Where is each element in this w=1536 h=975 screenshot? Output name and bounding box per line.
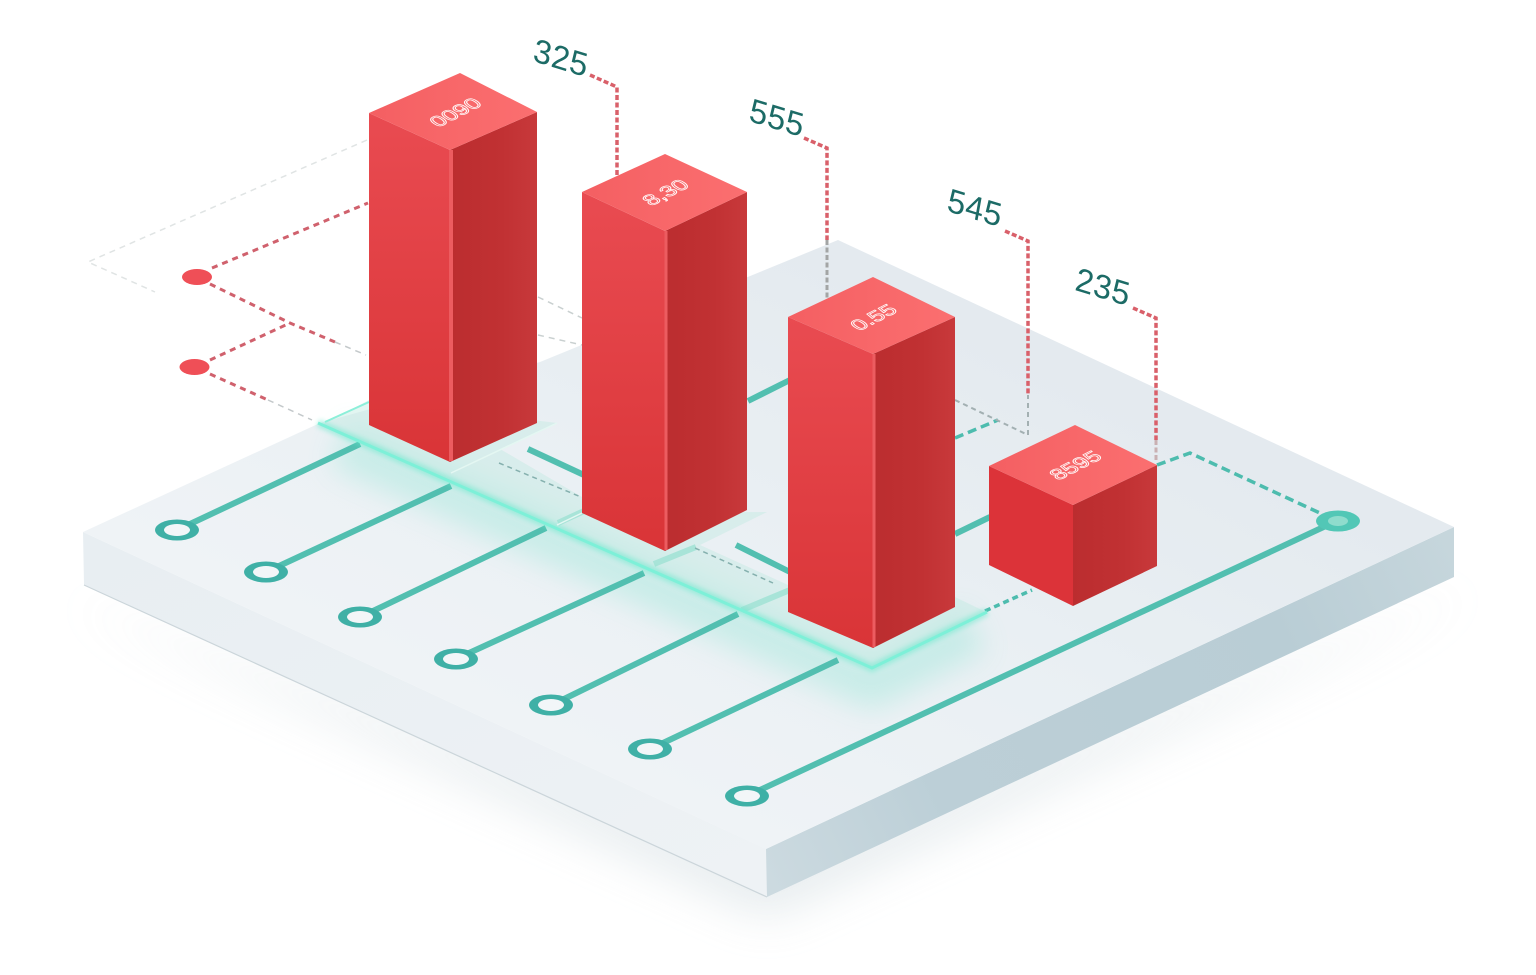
bar 1: [369, 73, 537, 462]
connector line 3: [338, 528, 546, 628]
value label 235 with leader: [1073, 261, 1156, 460]
platform shadow: [70, 590, 1475, 915]
glowing highlight band: [318, 402, 987, 668]
red dot 1: [182, 269, 212, 285]
glass plate under bar 2: [557, 513, 582, 525]
connector line 1: [155, 444, 360, 540]
value label 555 with leader: 555: [747, 92, 807, 145]
value label 555 with leader: [747, 92, 827, 298]
value label 325 with leader: [531, 32, 617, 176]
tinted glass region beside the band: [322, 400, 986, 668]
bar 2 top label: 8,30: [638, 177, 694, 209]
connector line 6: [628, 660, 838, 760]
glass plate under bar 1: [451, 423, 557, 473]
connector segments behind bars: [528, 380, 990, 572]
value label 545 with leader: [945, 182, 1028, 395]
bar 4: [989, 425, 1157, 606]
bar 4 top label: 8595: [1045, 448, 1107, 483]
panel: platform slab: [83, 240, 1454, 897]
bar 3 top label: 0.55: [846, 302, 902, 334]
bar 2: [582, 154, 747, 551]
end node marker: [1316, 510, 1360, 532]
connector line 4: [434, 573, 644, 670]
value label 325 with leader: 325: [531, 32, 591, 85]
faint line continuations under the glass: [558, 511, 790, 610]
teal connector lines with ring markers: [155, 380, 1330, 806]
connector line 5: [529, 614, 738, 716]
connector line 7: [725, 524, 1330, 806]
gray dashed guide near label 545: [955, 395, 1028, 435]
value label 235 with leader: 235: [1073, 261, 1133, 314]
teal dashed connectors: [955, 420, 1322, 611]
red dot 2: [180, 359, 210, 375]
gray dashed guide lines on platform: [499, 463, 773, 583]
bar 1 top label: 0090: [425, 95, 487, 130]
gray dashed guides behind bars: [88, 140, 582, 345]
connector line 2: [244, 486, 451, 582]
value label 545 with leader: 545: [945, 182, 1005, 235]
bar 3: [788, 277, 955, 648]
glow on platform: [340, 445, 975, 685]
red dashed callouts on left: [180, 203, 368, 420]
